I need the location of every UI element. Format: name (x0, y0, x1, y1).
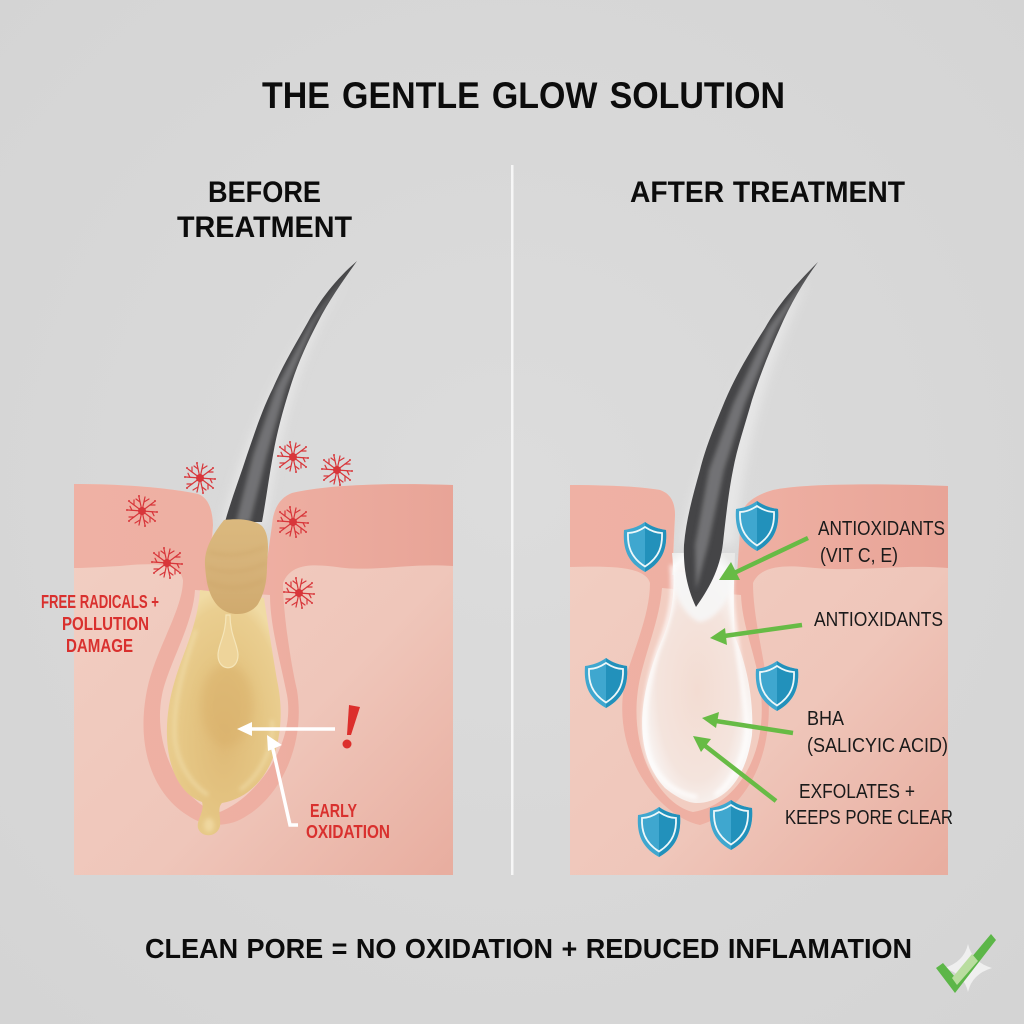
arrow: exfoliates (693, 736, 776, 801)
arrow: to oxidised core (237, 722, 335, 736)
label: antioxidants: ANTIOXIDANTS (814, 609, 943, 631)
label: antioxidants vit c e: (VIT C, E) (820, 545, 898, 567)
label: antioxidants vit c e (818, 518, 945, 567)
heading: before treatment: TREATMENT (177, 211, 352, 244)
divider between panels (511, 165, 514, 875)
hair shaft (684, 262, 818, 607)
label: bha salicylic acid: (SALICYIC ACID) (807, 735, 948, 757)
upper skin layer and pore wall (74, 484, 453, 825)
arrow: bha (702, 712, 793, 733)
free radicals (126, 441, 353, 609)
skin base (74, 484, 453, 875)
label: early oxidation (306, 801, 390, 842)
label: early oxidation: OXIDATION (306, 822, 390, 842)
icon: exclamation mark (342, 705, 360, 748)
arrow: antioxidants vit c e (719, 538, 808, 580)
protective shields (585, 501, 798, 857)
label: exfoliates keeps pore clear (785, 781, 953, 829)
upper skin layer and pore wall (570, 484, 948, 825)
sebum plug (205, 519, 268, 614)
title: THE GENTLE GLOW SOLUTION (262, 75, 785, 116)
panel: after treatment (570, 262, 953, 875)
label: antioxidants vit c e: ANTIOXIDANTS (818, 518, 945, 540)
arrow: antioxidants (710, 625, 802, 645)
label: early oxidation: EARLY (310, 801, 357, 821)
label: bha salicylic acid: BHA (807, 708, 845, 730)
label: bha salicylic acid (807, 708, 948, 757)
heading: after treatment: AFTER TREATMENT (630, 176, 905, 209)
label: free radicals + pollution damage: POLLUTION (62, 614, 149, 634)
hair shaft (225, 261, 357, 522)
footer statement: CLEAN PORE = NO OXIDATION + REDUCED INFLAMATION (145, 933, 912, 964)
pore inner lining (636, 588, 762, 812)
hair glow (680, 280, 808, 545)
skin base (570, 484, 948, 875)
label: exfoliates keeps pore clear: KEEPS PORE CLEAR (785, 807, 953, 829)
panel: before treatment (41, 261, 453, 875)
label: free radicals + pollution damage (41, 592, 159, 656)
label: exfoliates keeps pore clear: EXFOLATES + (799, 781, 915, 803)
label: free radicals + pollution damage: DAMAGE (66, 636, 133, 656)
arrow: early oxidation (267, 735, 298, 825)
heading: before treatment: BEFORE (208, 176, 321, 209)
icon: check mark with sparkle (936, 934, 996, 993)
pore inner lining (160, 590, 288, 813)
hair glow (222, 280, 345, 525)
sebum filled follicle (167, 590, 281, 835)
droplet (218, 615, 238, 668)
clean follicle (642, 553, 752, 803)
label: free radicals + pollution damage: FREE RADICALS + (41, 592, 159, 612)
heading: before treatment (177, 176, 352, 244)
